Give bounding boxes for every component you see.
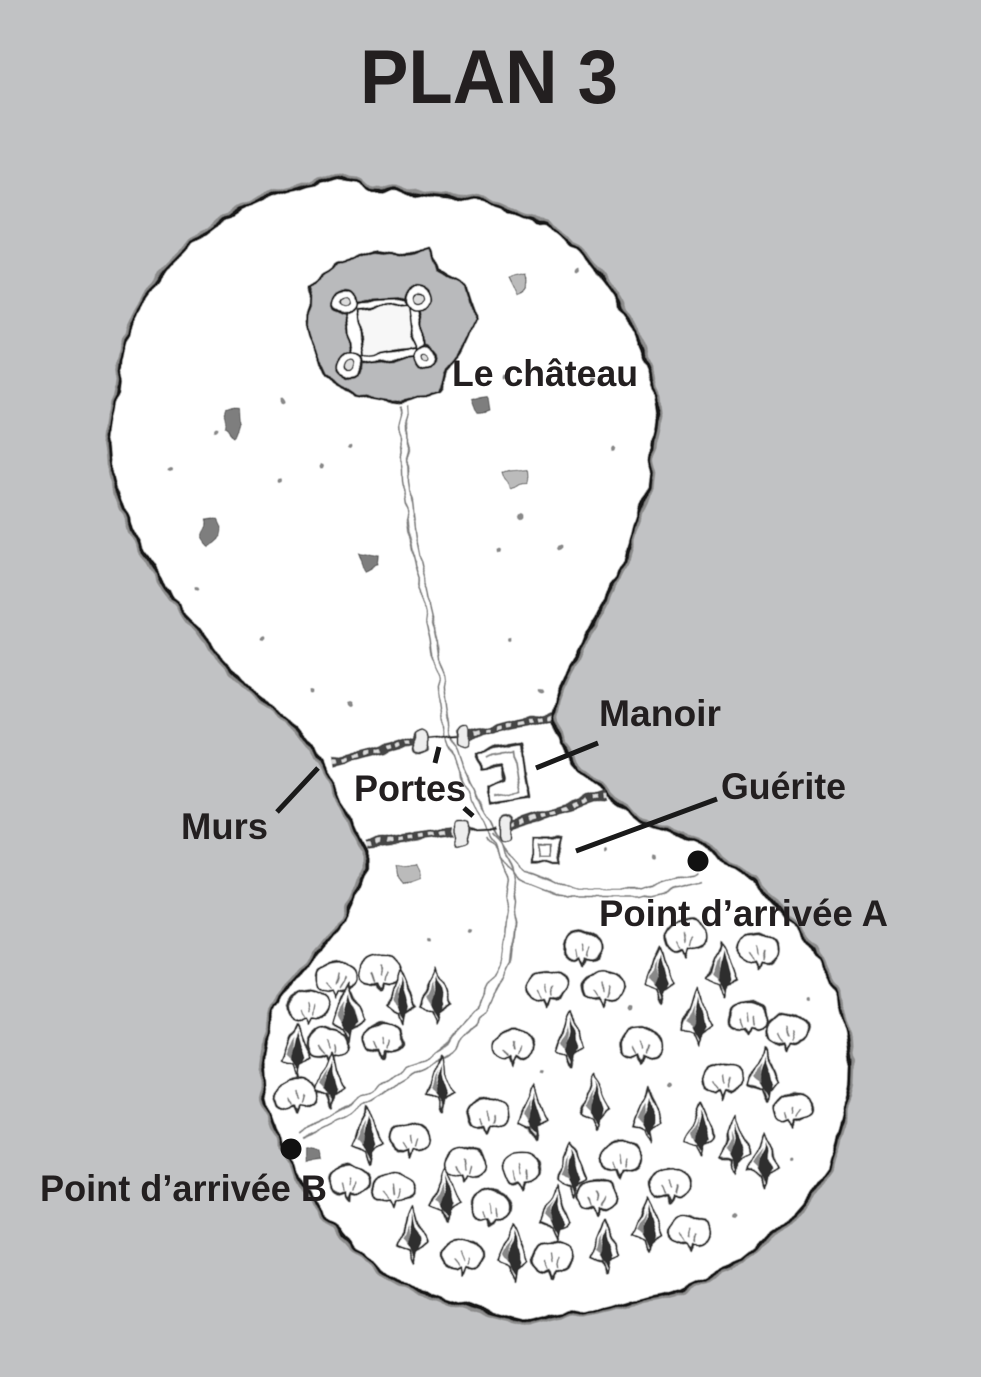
manor (477, 745, 529, 804)
label: gates: Portes (354, 768, 466, 809)
label: walls: Murs (181, 806, 268, 847)
label: manor: Manoir (599, 693, 721, 734)
leader lines (277, 743, 717, 851)
forest (276, 921, 814, 1280)
label: arrival point B: Point d’arrivée B (40, 1168, 327, 1209)
spots (200, 274, 528, 1160)
island shore halo (110, 178, 850, 1322)
title: PLAN 3 (360, 35, 618, 120)
guard post (533, 838, 559, 863)
road (300, 405, 700, 1137)
label: castle: Le château (452, 353, 638, 394)
castle moat (308, 248, 476, 402)
castle (331, 285, 437, 378)
label: arrival point A: Point d’arrivée A (599, 893, 888, 934)
upper wall (331, 716, 553, 762)
small dots (168, 268, 812, 1218)
map: island (110, 178, 850, 1322)
arrival point B marker (280, 1138, 302, 1160)
label: guard post: Guérite (721, 766, 846, 807)
arrival point A marker (688, 850, 708, 872)
manor inner (486, 752, 520, 796)
lower wall (365, 794, 606, 846)
island outline (110, 178, 850, 1322)
